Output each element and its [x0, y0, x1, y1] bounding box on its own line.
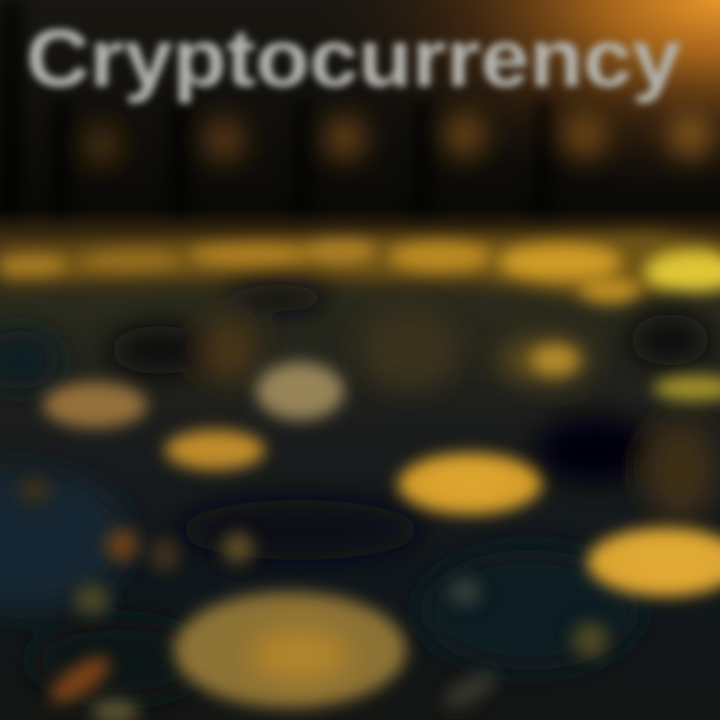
- coin highlights: [250, 468, 720, 681]
- coin: left tan: [43, 382, 147, 428]
- orange glow top right: [300, 0, 720, 200]
- coins: [43, 345, 720, 708]
- dark vertical columns: [0, 0, 551, 215]
- coin: bottom large: [174, 592, 406, 708]
- coin: gold small: [165, 430, 265, 470]
- coin: small amber: [531, 345, 579, 375]
- title: Cryptocurrency: [26, 13, 681, 104]
- coin: right yellow stripe: [653, 375, 720, 401]
- amber dots row: [84, 113, 710, 165]
- coin: pale center: [256, 362, 344, 420]
- mid-section dark texture: [0, 284, 716, 700]
- gold horizontal band: [0, 232, 720, 304]
- small glowing spots: [19, 478, 608, 720]
- coin: bright large: [398, 454, 542, 514]
- coin: right large: [587, 528, 720, 596]
